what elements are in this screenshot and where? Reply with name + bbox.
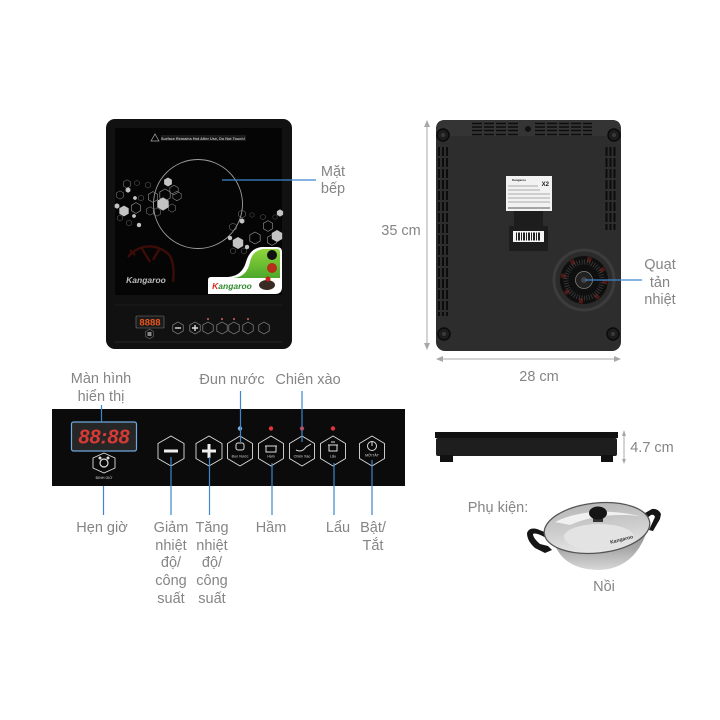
label: Mặt bếp: bếp <box>321 181 345 197</box>
label: Giảm nhiệt độ/công suất: độ/ <box>161 555 182 571</box>
label: Giảm nhiệt độ/công suất: Giảm <box>154 520 188 536</box>
Kangaroo wordmark: Kangaroo <box>126 275 166 285</box>
label: Bật/Tắt: Tắt <box>363 537 383 554</box>
cooking ring <box>154 160 242 248</box>
rubber feet <box>437 129 620 340</box>
arrow: Hầm <box>271 463 273 515</box>
arrow: Chiên xào <box>301 391 303 442</box>
arrow: Bật/Tắt <box>371 460 373 515</box>
hexagon pattern left <box>115 178 181 227</box>
green promo sticker: Kangaroo <box>212 281 252 291</box>
button: chiên xào <box>290 426 314 466</box>
rating sticker: Kangaroo <box>512 178 526 182</box>
label: Nồi: Nồi <box>593 579 615 595</box>
button: chiên xào: Chiên Xào <box>294 454 310 458</box>
arrow: Lẩu <box>333 463 335 515</box>
arrow: Màn hình hiển thị <box>100 405 102 422</box>
label: Mặt bếp: Mặt <box>321 164 345 180</box>
button: lẩu: Lẩu <box>330 454 336 458</box>
dimension: height 35 cm <box>381 120 430 350</box>
button: tăng <box>196 436 222 466</box>
label: Giảm nhiệt độ/công suất: nhiệt <box>155 538 187 554</box>
label: Tăng nhiệt độ/công suất: nhiệt <box>196 538 228 554</box>
right handle <box>645 509 661 531</box>
barcode plate <box>509 211 548 251</box>
display <box>72 422 136 451</box>
arrow: Giảm nhiệt độ <box>170 457 172 515</box>
label: Tăng nhiệt độ/công suất: Tăng <box>195 520 229 536</box>
cooker side view <box>435 432 618 462</box>
control strip buttons <box>173 318 269 334</box>
button: hẹn giờ <box>93 453 115 480</box>
label: Quạt tản nhiệt: nhiệt <box>644 292 676 308</box>
button: bật tắt: MỞ/TẮT <box>365 452 380 458</box>
cooker back view <box>436 120 621 351</box>
pot accessory: Kangaroo <box>610 534 634 546</box>
label: Màn hình hiển thị: hiển thị <box>78 389 124 405</box>
button: hẹn giờ: ĐỊNH GIỜ <box>96 475 112 480</box>
cooker top view <box>106 119 292 349</box>
label: Lẩu: Lẩu <box>326 520 350 536</box>
label: Quạt tản nhiệt: Quạt <box>644 257 676 273</box>
label: Giảm nhiệt độ/công suất: suất <box>157 591 185 607</box>
label: Chiên xào: Chiên xào <box>275 372 341 388</box>
button: hầm: Hầm <box>267 454 275 458</box>
dimension: width 28 cm: 28 cm <box>519 369 559 385</box>
warning strip: Surface Remains Hot After Use, Do Not Touch! <box>161 137 245 141</box>
label: Quạt tản nhiệt: tản <box>650 275 670 291</box>
pot body <box>553 528 648 570</box>
glass lid <box>542 498 652 558</box>
dimension: height 35 cm: 35 cm <box>381 223 421 239</box>
pot accessory <box>527 498 661 570</box>
dimension: width 28 cm <box>436 356 621 385</box>
button: giảm <box>158 436 184 466</box>
display: 88:88 <box>78 426 130 448</box>
arrow: Mặt bếp <box>222 179 316 181</box>
dimension: depth 4.7 cm: 4.7 cm <box>630 440 674 456</box>
control strip display: 8888 <box>139 318 161 328</box>
label: Hầm: Hầm <box>256 520 286 536</box>
label: Tăng nhiệt độ/công suất: suất <box>198 591 226 607</box>
label: Màn hình hiển thị: Màn hình <box>71 371 131 387</box>
rating sticker: X2 <box>542 182 550 188</box>
vents right <box>606 147 614 230</box>
label: Đun nước: Đun nước <box>199 372 265 388</box>
label: Hẹn giờ: Hẹn giờ <box>76 520 128 536</box>
control strip display <box>136 316 164 339</box>
arrow: Đun nước <box>240 391 242 442</box>
arrow: Tăng nhiệt độ <box>208 457 210 515</box>
button: bật tắt <box>360 436 384 466</box>
button: lẩu <box>320 426 346 466</box>
green promo sticker <box>208 247 282 294</box>
vents left <box>439 147 447 316</box>
vents top <box>472 124 592 134</box>
label: Giảm nhiệt độ/công suất: công <box>155 573 187 589</box>
arrow: Hẹn giờ <box>102 486 104 515</box>
button: hầm <box>258 426 284 466</box>
warning strip <box>151 134 246 141</box>
cooling fan <box>554 250 614 310</box>
label: Tăng nhiệt độ/công suất: công <box>196 573 228 589</box>
rating sticker <box>506 176 552 211</box>
control panel <box>52 409 405 486</box>
label: Bật/Tắt: Bật/ <box>360 520 387 536</box>
button: đun nước <box>228 426 252 466</box>
button: đun nước: Đun Nước <box>232 454 249 458</box>
hexagon pattern right <box>228 209 283 254</box>
red heat mark <box>128 246 174 282</box>
label: Phụ kiện: Phụ kiện: <box>468 500 528 516</box>
label: Tăng nhiệt độ/công suất: độ/ <box>202 555 223 571</box>
arrow: Quạt tản nhiệt <box>585 279 642 281</box>
left handle <box>527 528 552 553</box>
dimension: depth 4.7 cm <box>622 430 674 464</box>
